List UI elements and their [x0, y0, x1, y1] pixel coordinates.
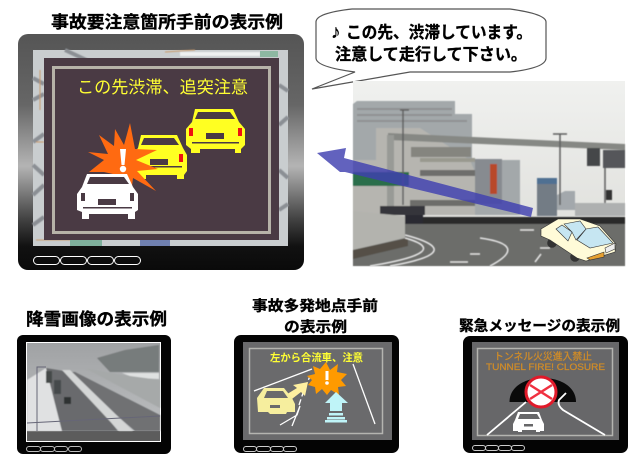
callout: voice message: ♪ [331, 22, 340, 43]
monitor buttons [26, 446, 82, 452]
sign message: 左から合流車、注意 [270, 351, 363, 364]
title: accident-prone example: の表示例 [284, 318, 347, 336]
photo: expressway scene [317, 81, 625, 266]
monitor buttons [472, 446, 524, 450]
arrow: straight [325, 392, 348, 422]
road markings [370, 230, 550, 266]
icon: yellow car middle [132, 135, 187, 179]
callout: voice message: この先、渋滞しています。 [346, 23, 532, 42]
icon: burst [307, 362, 347, 395]
icon: cream car [257, 388, 295, 414]
arrow: merge [284, 382, 308, 402]
title: snow example: 降雪画像の表示例 [26, 310, 167, 329]
title: emergency message example: 緊急メッセージの表示例 [459, 317, 620, 335]
icon: orange burst with exclamation [88, 123, 158, 191]
icon: white car [513, 412, 544, 432]
sign message: TUNNEL FIRE! CLOSURE [486, 362, 605, 373]
monitor bezel [18, 34, 304, 270]
callout: voice message [312, 9, 546, 89]
monitor buttons [244, 446, 296, 452]
panel: emergency monitor [463, 336, 628, 453]
sign message: この先渋滞、追突注意 [77, 78, 248, 97]
icon: tunnel [510, 378, 576, 402]
snow photo [27, 343, 160, 431]
icon: yellow car rear [186, 109, 245, 153]
icon: white car front [77, 174, 138, 219]
panel: snow monitor [17, 335, 171, 454]
title: accident-prone example: 事故多発地点手前 [252, 297, 378, 315]
map background [33, 50, 288, 246]
icon: no-entry sign [526, 377, 556, 407]
sign message [486, 350, 605, 373]
sign panel [44, 58, 279, 240]
monitor buttons [34, 256, 140, 264]
road lines [254, 364, 375, 426]
arrow: direction to monitor [317, 148, 533, 217]
panel: accident-prone monitor [234, 335, 399, 453]
sign message: トンネル火災進入禁止 [494, 350, 592, 363]
title: main example: 事故要注意箇所手前の表示例 [51, 12, 283, 32]
callout: voice message: 注意して走行して下さい。 [335, 45, 527, 64]
title: accident-prone example [252, 297, 378, 336]
panel: main monitor [18, 34, 304, 270]
icon: cream car [541, 219, 616, 262]
road lines [487, 393, 605, 435]
